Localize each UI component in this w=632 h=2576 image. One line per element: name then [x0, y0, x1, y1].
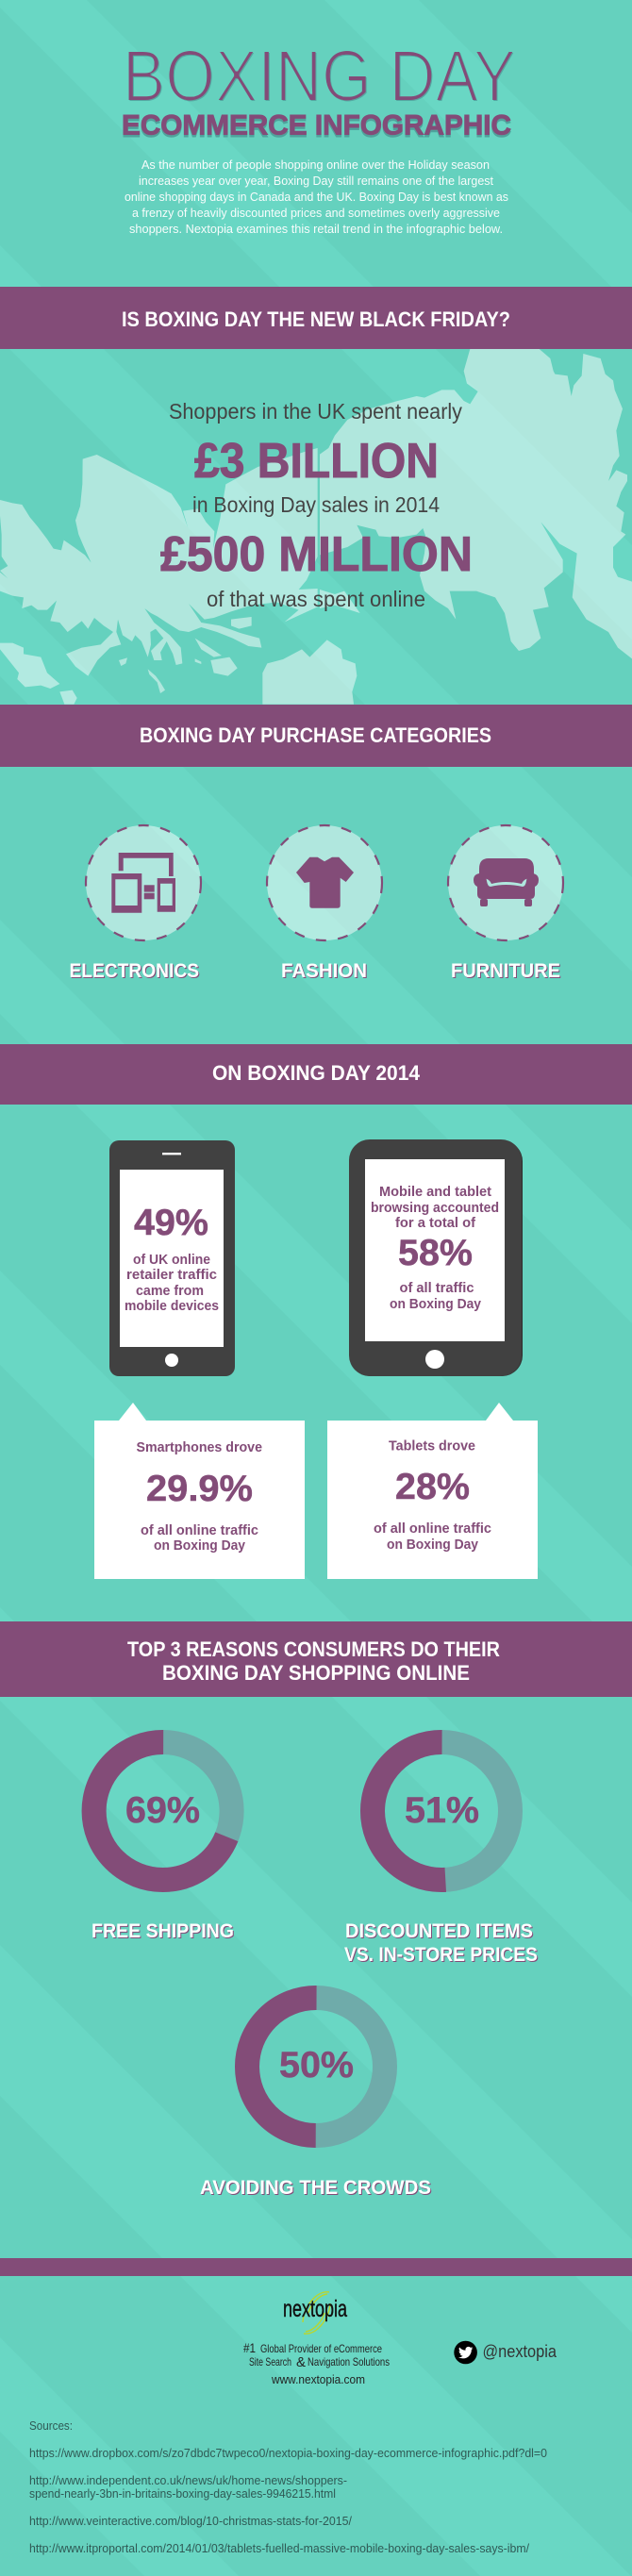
label: discounted items: VS. IN-STORE PRICES [344, 1944, 538, 1966]
phone: 49%: of UK online [133, 1252, 210, 1268]
banner: top 3 reasons [0, 1621, 632, 1697]
callout: smartphones: Smartphones drove [136, 1439, 262, 1455]
banner: purchase categories [0, 705, 632, 767]
banner: is boxing day the new black friday: IS BOXING DAY THE NEW BLACK FRIDAY? [122, 307, 510, 331]
tagline: Global Provider of eCommerce [260, 2342, 382, 2355]
stat text: uk spending: of that was spent online [207, 587, 425, 611]
donut chart: free shipping 69% [91, 1742, 234, 1942]
label: furniture: FURNITURE [451, 960, 560, 982]
logo: nextopia: nextopia [283, 2296, 347, 2322]
callout: smartphones: on Boxing Day [154, 1537, 246, 1554]
label: electronics: ELECTRONICS [70, 960, 199, 982]
sources: spend-nearly-3bn-in-britains-boxing-day-sales-9946215.html [29, 2487, 336, 2501]
callout: tablets [327, 1403, 538, 1579]
donut chart: discounted items 51%: 51% [405, 1790, 479, 1831]
twitter handle: @nextopia [483, 2342, 557, 2361]
label: discounted items [344, 1920, 538, 1966]
title [122, 36, 516, 141]
callout: tablets: of all online traffic [374, 1521, 491, 1537]
callout: tablets: on Boxing Day [387, 1537, 479, 1553]
icon: devices [111, 853, 175, 913]
footer band [0, 2258, 632, 2276]
stat text: uk spending: in Boxing Day sales in 2014 [192, 492, 440, 517]
stat text: uk spending: £3 BILLION [194, 434, 439, 489]
intro text block: online shopping days in Canada and the UK. Boxing Day is best known as [125, 190, 508, 204]
callout: smartphones [94, 1403, 305, 1579]
logo: nextopia [283, 2292, 347, 2334]
banner: on boxing day 2014: ON BOXING DAY 2014 [212, 1061, 421, 1085]
callout: tablets: 28% [395, 1467, 470, 1507]
sources: https://www.dropbox.com/s/zo7dbdc7twpeco0/nextopia-boxing-day-ecommerce-infographic.pdf?dl=0 [29, 2447, 547, 2460]
donut chart: discounted items 51% [344, 1742, 538, 1966]
phone: 49%: came from [136, 1283, 204, 1299]
label: discounted items: DISCOUNTED ITEMS [345, 1920, 533, 1942]
label: fashion: FASHION [281, 960, 367, 982]
tagline: www.nextopia.com [271, 2372, 365, 2386]
tablet: 58%: on Boxing Day [390, 1296, 482, 1312]
category: fashion [267, 825, 382, 982]
intro text block [125, 158, 508, 236]
donut chart: free shipping 69%: 69% [125, 1790, 200, 1831]
label: avoiding the crowds: AVOIDING THE CROWDS [200, 2177, 431, 2199]
banner: top 3 reasons: BOXING DAY SHOPPING ONLINE [162, 1661, 470, 1685]
donut chart: avoiding the crowds 50%: 50% [279, 2045, 354, 2086]
phone: 49%: mobile devices [125, 1298, 219, 1314]
sources: http://www.independent.co.uk/news/uk/home-news/shoppers- [29, 2474, 347, 2487]
icon: t-shirt [296, 857, 354, 908]
sources [29, 2419, 547, 2555]
callout: smartphones: of all online traffic [141, 1522, 258, 1538]
tablet: 58% [349, 1139, 523, 1376]
donut chart: avoiding the crowds 50% [200, 1998, 431, 2199]
title: ECOMMERCE INFOGRAPHIC [122, 109, 511, 141]
sources: http://www.itproportal.com/2014/01/03/tablets-fuelled-massive-mobile-boxing-day-sales-says-ibm/ [29, 2542, 530, 2555]
intro text block: increases year over year, Boxing Day still remains one of the largest [139, 174, 493, 188]
category: furniture [448, 825, 563, 982]
intro text block: a frenzy of heavily discounted prices and sometimes overly aggressive [132, 206, 500, 220]
callout: tablets: Tablets drove [389, 1438, 475, 1454]
tagline: Site Search [249, 2355, 291, 2368]
label: free shipping: FREE SHIPPING [91, 1920, 234, 1942]
tablet: 58%: for a total of [395, 1215, 476, 1231]
phone: 49%: 49% [134, 1203, 208, 1243]
category: electronics [70, 825, 201, 982]
tagline: #1 [243, 2340, 256, 2355]
phone: 49%: retailer traffic [126, 1267, 217, 1283]
map of the UK [0, 349, 632, 705]
banner: top 3 reasons: TOP 3 REASONS CONSUMERS DO THEIR [127, 1637, 500, 1661]
stat text: uk spending [160, 399, 473, 611]
banner: is boxing day the new black friday [0, 287, 632, 349]
tagline [243, 2340, 390, 2386]
tablet: 58%: browsing accounted [371, 1200, 499, 1216]
stat text: uk spending: Shoppers in the UK spent nearly [169, 399, 462, 424]
tablet: 58%: Mobile and tablet [379, 1184, 491, 1200]
twitter handle [454, 2341, 557, 2364]
sources: Sources: [29, 2419, 73, 2433]
banner: on boxing day 2014 [0, 1044, 632, 1105]
banner: purchase categories: BOXING DAY PURCHASE CATEGORIES [140, 723, 491, 747]
intro text block: As the number of people shopping online over the Holiday season [141, 158, 490, 172]
phone: 49% [109, 1140, 235, 1376]
intro text block: shoppers. Nextopia examines this retail trend in the infographic below. [129, 222, 503, 236]
stat text: uk spending: £500 MILLION [160, 527, 473, 582]
callout: smartphones: 29.9% [146, 1469, 253, 1509]
tablet: 58%: of all traffic [400, 1280, 474, 1296]
tagline: & [296, 2354, 306, 2370]
tagline: Navigation Solutions [308, 2355, 390, 2368]
tablet: 58%: 58% [398, 1233, 473, 1273]
icon: sofa [474, 858, 539, 906]
sources: http://www.veinteractive.com/blog/10-christmas-stats-for-2015/ [29, 2515, 353, 2528]
title: BOXING DAY [123, 36, 516, 117]
